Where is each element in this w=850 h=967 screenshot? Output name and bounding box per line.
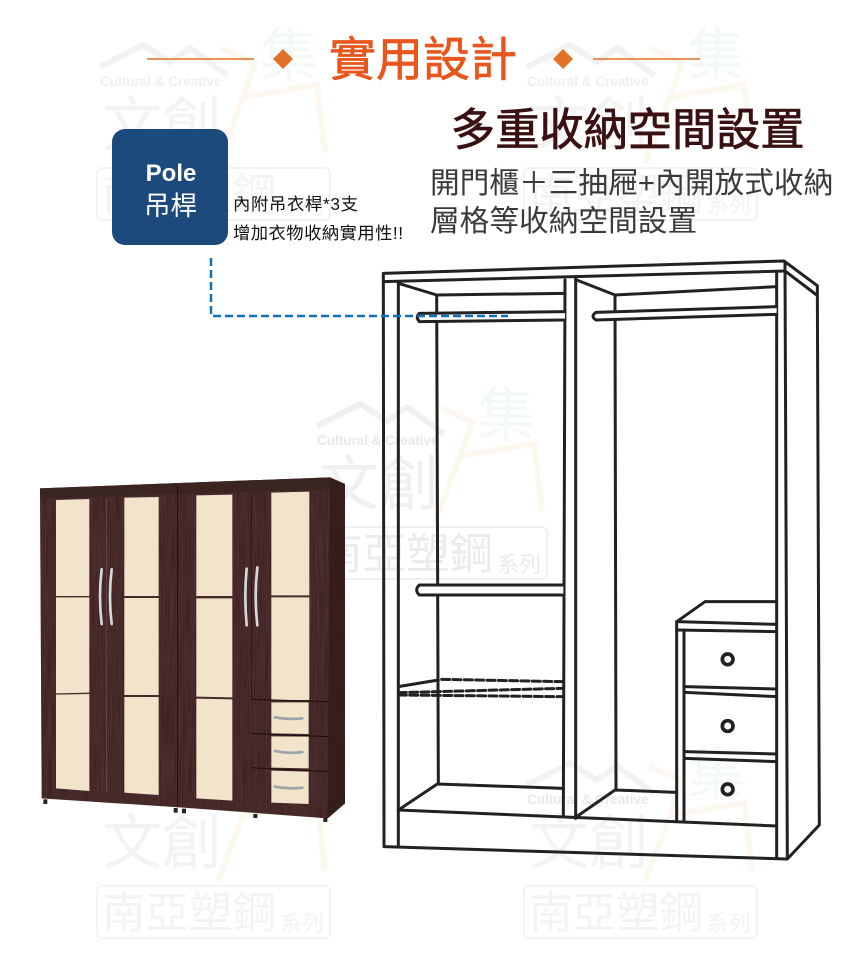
watermark: bottom left: 集 [260,742,318,807]
watermark: top right: 集 [687,24,745,89]
watermark: center: 集 [477,383,535,448]
watermark: top left: 系列 [280,193,324,218]
drawer unit [677,602,777,822]
badge: Pole 吊桿 [112,129,228,245]
light panels [56,492,309,804]
cabinet body [40,477,345,818]
text block: storage description: 開門櫃＋三抽屜+內開放式收納 [430,167,833,200]
badge: Pole 吊桿: Pole [146,160,196,187]
left compartment back lines and center post [398,278,777,818]
watermark: bottom left: Cultural & Creative [100,792,222,807]
watermark: top left [97,24,330,220]
watermark: bottom right: 文創 [529,810,649,877]
title: 實用設計 with diamond rules: 實用設計 [329,33,517,86]
badge: Pole 吊桿: 吊桿 [144,191,197,221]
callout text: pole description: 增加衣物收納實用性!! [233,223,403,243]
top board and outer frame [383,261,819,859]
hanging poles [417,307,777,595]
watermark: top left: Cultural & Creative [100,74,222,89]
watermark: center: 文創 [319,451,439,518]
watermark: top right: 南亞塑鋼 [529,172,703,220]
watermark: center: 南亞塑鋼 [319,531,493,579]
watermark: bottom left [97,742,330,938]
line drawing: open wardrobe interior [383,261,819,859]
watermark: bottom left: 系列 [280,911,324,936]
watermark: bottom right: 系列 [707,911,751,936]
watermark: bottom right: 集 [687,742,745,807]
watermark: center: 系列 [497,552,541,577]
photo: closed wardrobe [40,477,345,822]
text block: storage description: 層格等收納空間設置 [430,205,697,238]
heading: 多重收納空間設置: 多重收納空間設置 [451,106,805,155]
watermark: top right: 文創 [529,92,649,159]
watermark: top right: Cultural & Creative [527,74,649,89]
watermark: bottom right: Cultural & Creative [527,792,649,807]
watermark: center [314,383,547,579]
callout text: pole description [233,194,403,243]
connector: dashed leader line from badge to pole [211,258,508,316]
watermark: top right: 系列 [707,193,751,218]
feet [43,799,327,822]
handles [100,567,302,788]
drawer seams [251,699,328,772]
watermark: top left: 集 [260,24,318,89]
watermark: bottom right [524,742,757,938]
text block: storage description [430,167,833,238]
watermark: bottom left: 南亞塑鋼 [102,890,276,938]
watermark: bottom right: 南亞塑鋼 [529,890,703,938]
title: 實用設計 with diamond rules [147,33,700,86]
dashed shelf [398,679,563,697]
watermark: top left: 文創 [102,92,222,159]
watermark: top right [524,24,757,220]
watermark: top left: 南亞塑鋼 [102,172,276,220]
watermark: bottom left: 文創 [102,810,222,877]
callout text: pole description: 內附吊衣桿*3支 [233,194,358,214]
watermark: center: Cultural & Creative [317,433,439,448]
